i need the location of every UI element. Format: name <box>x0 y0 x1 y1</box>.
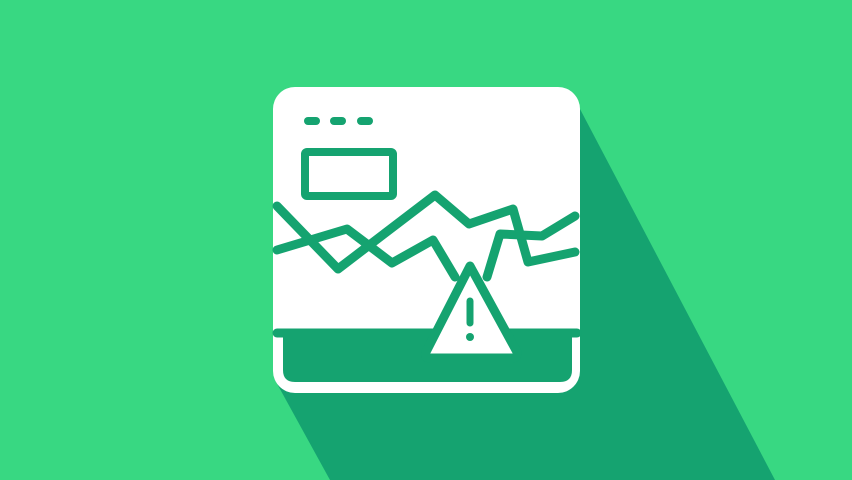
tray: bottom fill <box>277 333 577 382</box>
chart: line one <box>277 195 575 269</box>
icon: warning triangle <box>426 266 517 358</box>
chart: line two <box>277 216 575 277</box>
long shadow <box>275 90 775 480</box>
icon: window dots <box>308 117 369 125</box>
icon: small rectangle <box>305 152 393 196</box>
icon: white rounded window <box>273 87 580 393</box>
